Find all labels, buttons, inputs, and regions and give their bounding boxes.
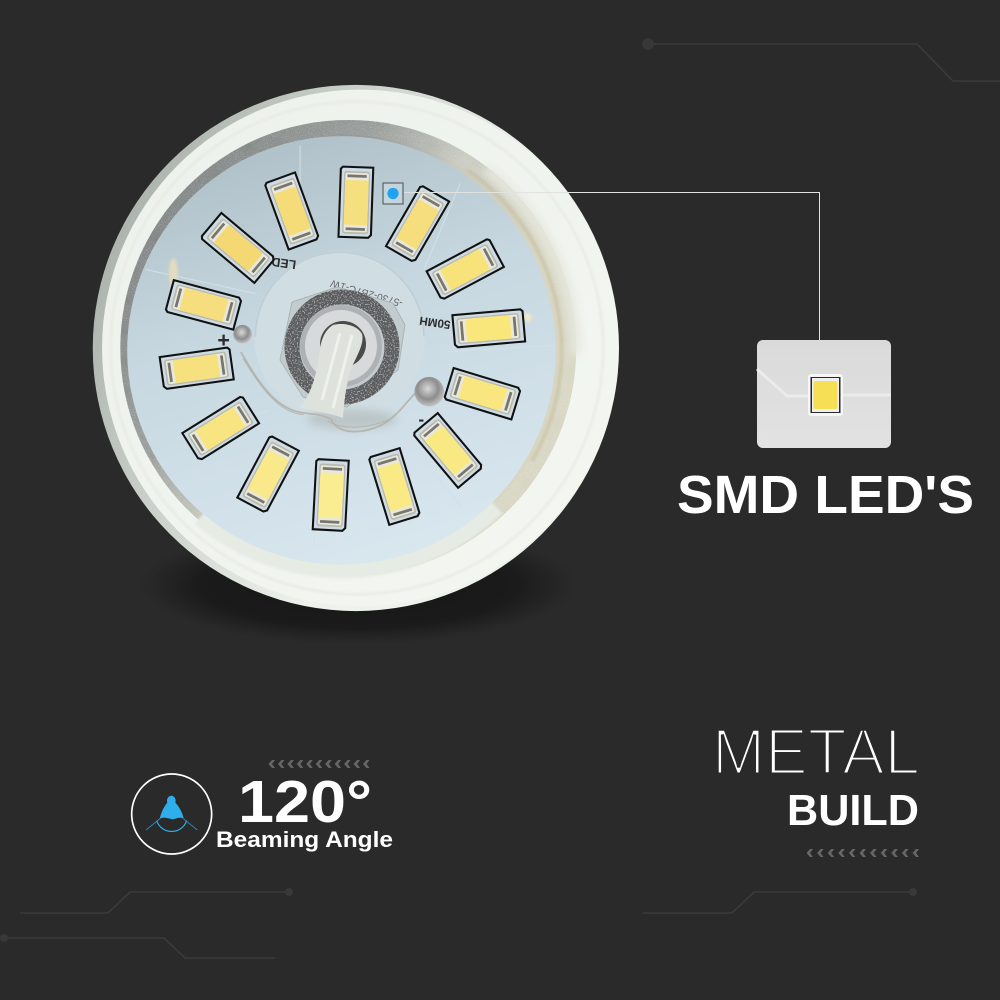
board markings: +: [217, 328, 230, 352]
outer rim: [93, 85, 619, 611]
fiber stem: [300, 324, 363, 418]
SMD chip: [808, 374, 843, 416]
LED 11: [444, 368, 521, 419]
LED 7: [237, 436, 299, 513]
solder point right: [414, 377, 444, 406]
board markings: [217, 254, 451, 432]
circuit line: top right: [642, 38, 1000, 81]
leader line to SMD card: [404, 192, 820, 340]
LED chips ring: [160, 167, 525, 531]
METAL heading: METAL: [712, 715, 920, 788]
board markings: -: [418, 412, 424, 432]
LED 10: [413, 413, 483, 488]
120 degree value: 120°: [238, 769, 372, 835]
BUILD heading: BUILD: [787, 786, 919, 835]
LED 9: [369, 448, 420, 525]
LED 14: [386, 185, 449, 262]
chevron row left: [268, 760, 370, 768]
LED 4: [165, 280, 242, 330]
LED 1: [338, 167, 373, 238]
circuit line: bottom left lower: [0, 934, 275, 958]
LED 12: [452, 309, 525, 348]
board markings: 50MH: [419, 314, 451, 331]
Beaming Angle label: Beaming Angle: [216, 827, 393, 852]
circuit board: [127, 136, 556, 565]
solder point left: [233, 325, 252, 343]
inner well: [120, 120, 576, 576]
icon: beam angle: [132, 774, 212, 854]
center hub: [254, 251, 425, 430]
circuit line: bottom right: [643, 888, 917, 913]
LED bulb photo: [93, 85, 619, 611]
SMD LED card: [757, 340, 891, 448]
LED 2: [265, 172, 319, 250]
LED 5: [160, 347, 234, 389]
LED 6: [182, 396, 259, 461]
hex nut: [280, 287, 405, 407]
board markings: -5730-2B7C-1W: [329, 277, 404, 308]
SMD LED'S heading: SMD LED'S: [677, 465, 974, 525]
LED 8: [313, 459, 349, 531]
LED 3: [201, 213, 275, 283]
wires: [241, 352, 417, 432]
LED 13: [427, 238, 504, 300]
board markings: LED: [271, 254, 297, 272]
callout marker: blue dot: [383, 183, 403, 204]
chevron row right: [806, 849, 919, 857]
bulb shadow: [128, 523, 588, 647]
circuit line: bottom left upper: [20, 888, 293, 913]
